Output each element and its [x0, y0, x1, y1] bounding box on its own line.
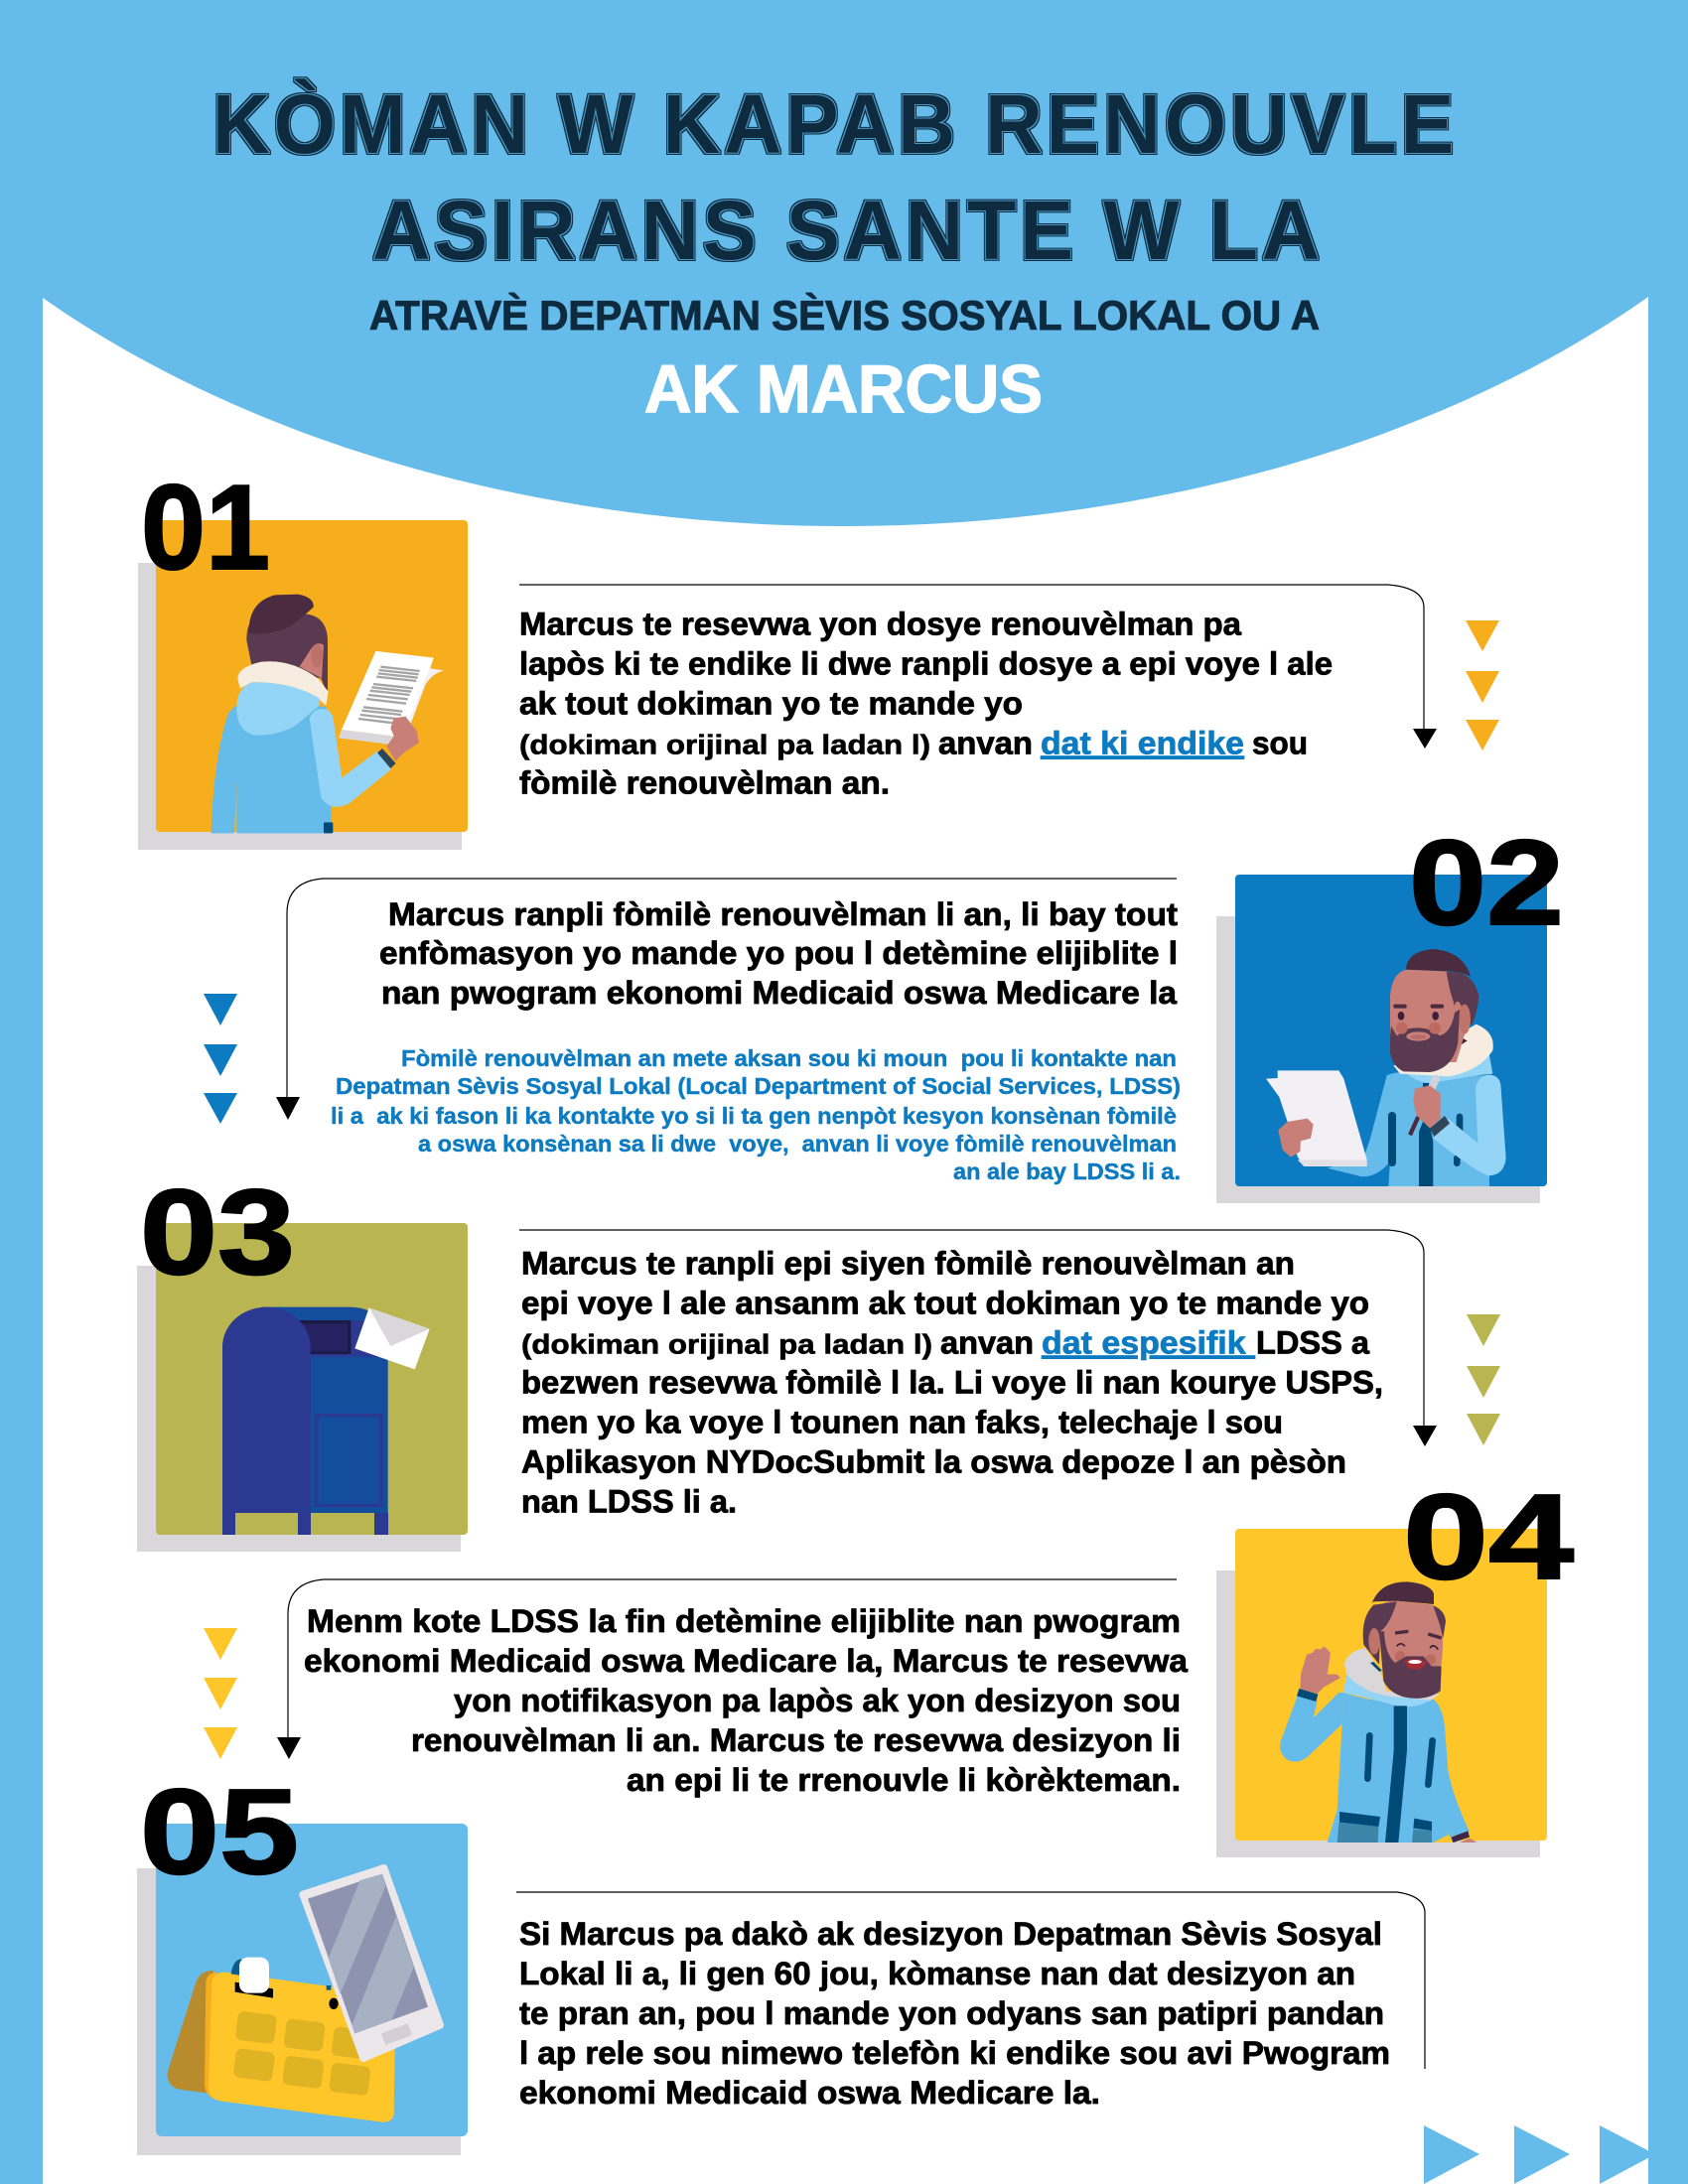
- note: step 2: li a ak ki fason li ka kontakte yo si li ta gen nenpòt kesyon konsènan fòmilè: [331, 1103, 1177, 1129]
- text block: step 5: Lokal li a, li gen 60 jou, kòmanse nan dat desizyon an: [519, 1956, 1355, 1991]
- note: step 2: Depatman Sèvis Sosyal Lokal (Local Department of Social Services, LDSS): [336, 1073, 1181, 1099]
- text block: step 4: an epi li te rrenouvle li kòrèkteman.: [627, 1762, 1181, 1798]
- text block: step 3: (dokiman orijinal pa ladan l): [521, 1328, 932, 1360]
- text block: step 1: anvan: [938, 725, 1033, 760]
- illustration: man reading document: [138, 520, 468, 850]
- text block: step 1: Marcus te resevwa yon dosye renouvèlman pa: [519, 606, 1241, 641]
- arrow: step 3 connector: [519, 1230, 1437, 1446]
- text block: step 1: sou: [1252, 725, 1308, 760]
- number 01: 01: [141, 460, 270, 595]
- text block: step 3: nan LDSS li a.: [521, 1483, 737, 1519]
- title: KÒMAN W KAPAB RENOUVLE: [212, 77, 1458, 171]
- title: [212, 77, 1458, 277]
- text block: step 2: [379, 896, 1178, 1011]
- note: step 2: a oswa konsènan sa li dwe voye, anvan li voye fòmilè renouvèlman: [418, 1131, 1177, 1157]
- text block: step 1: fòmilè renouvèlman an.: [519, 764, 890, 800]
- text block: step 1: (dokiman orijinal pa ladan l): [519, 729, 930, 760]
- arrow: step 4 connector: [277, 1579, 1177, 1759]
- note: step 2: Fòmilè renouvèlman an mete aksan sou ki moun pou li kontakte nan: [401, 1045, 1177, 1071]
- text block: step 1: ak tout dokiman yo te mande yo: [519, 685, 1023, 721]
- text block: step 3: LDSS a: [1256, 1324, 1369, 1360]
- panel: step 2: [204, 815, 1564, 1203]
- text block: step 3: bezwen resevwa fòmilè l la. Li voye li nan kourye USPS,: [521, 1364, 1383, 1400]
- panel: step 4: [204, 1469, 1574, 1857]
- text block: step 3: anvan: [940, 1324, 1034, 1360]
- title: ASIRANS SANTE W LA: [372, 184, 1324, 277]
- number 02: 02: [1409, 815, 1564, 950]
- text block: step 4: yon notifikasyon pa lapòs ak yon desizyon sou: [454, 1683, 1181, 1718]
- arrows: step 1 triangles: [1466, 620, 1499, 751]
- panel: step 5: [137, 1764, 1655, 2184]
- text block: step 2: enfòmasyon yo mande yo pou l detèmine elijiblite l: [379, 935, 1178, 971]
- arrows: step 4 triangles: [204, 1628, 237, 1759]
- note: step 2: an ale bay LDSS li a.: [953, 1159, 1181, 1184]
- text block: step 5: [519, 1916, 1390, 2111]
- subtitle: ATRAVÈ DEPATMAN SÈVIS SOSYAL LOKAL OU A: [369, 292, 1320, 339]
- illustration: calendar and phone: [137, 1824, 468, 2155]
- arrows: step 2 triangles: [204, 994, 237, 1124]
- illustration: man waving: [1216, 1529, 1547, 1857]
- text block: step 5: te pran an, pou l mande yon odyans san patipri pandan: [519, 1995, 1384, 2031]
- text block: step 4: renouvèlman li an. Marcus te resevwa desizyon li: [411, 1722, 1181, 1758]
- illustration: man with paper and pen: [1216, 875, 1547, 1203]
- text block: step 3: epi voye l ale ansanm ak tout dokiman yo te mande yo: [521, 1285, 1369, 1320]
- note: step 2: [331, 1045, 1181, 1184]
- text block: step 1: dat ki endike: [1041, 725, 1244, 760]
- number 05: 05: [140, 1764, 299, 1899]
- line: step 5 connector: [516, 1892, 1425, 2069]
- subtitle: with Marcus: AK MARCUS: [644, 351, 1043, 427]
- text block: step 4: [304, 1603, 1188, 1798]
- text block: step 4: ekonomi Medicaid oswa Medicare la, Marcus te resevwa: [304, 1643, 1188, 1679]
- arrows: bottom triangles: [1424, 2125, 1655, 2184]
- text block: step 3: [521, 1245, 1383, 1519]
- text block: step 5: ekonomi Medicaid oswa Medicare la.: [519, 2075, 1100, 2111]
- text block: step 5: Si Marcus pa dakò ak desizyon Depatman Sèvis Sosyal: [519, 1916, 1382, 1952]
- panel: step 1: [138, 460, 1499, 850]
- text block: step 5: l ap rele sou nimewo telefòn ki endike sou avi Pwogram: [519, 2035, 1390, 2071]
- text block: step 3: dat espesifik: [1042, 1324, 1255, 1360]
- text block: step 1: lapòs ki te endike li dwe ranpli dosye a epi voye l ale: [519, 645, 1333, 681]
- number 03: 03: [140, 1164, 295, 1299]
- text block: step 2: nan pwogram ekonomi Medicaid oswa Medicare la: [381, 975, 1177, 1011]
- arrow: step 1 connector: [519, 585, 1437, 749]
- text block: step 2: Marcus ranpli fòmilè renouvèlman li an, li bay tout: [388, 896, 1178, 932]
- panel: step 3: [137, 1164, 1500, 1552]
- number 04: 04: [1403, 1469, 1574, 1604]
- text block: step 4: Menm kote LDSS la fin detèmine elijiblite nan pwogram: [307, 1603, 1181, 1639]
- text block: step 3: men yo ka voye l tounen nan faks, telechaje l sou: [521, 1404, 1283, 1439]
- text block: step 1: [519, 606, 1333, 800]
- illustration: mailbox and envelope: [137, 1223, 468, 1552]
- arrows: step 3 triangles: [1467, 1314, 1500, 1445]
- text block: step 3: Marcus te ranpli epi siyen fòmilè renouvèlman an: [521, 1245, 1295, 1281]
- text block: step 3: Aplikasyon NYDocSubmit la oswa depoze l an pèsòn: [521, 1443, 1346, 1479]
- arrow: step 2 connector: [276, 879, 1177, 1120]
